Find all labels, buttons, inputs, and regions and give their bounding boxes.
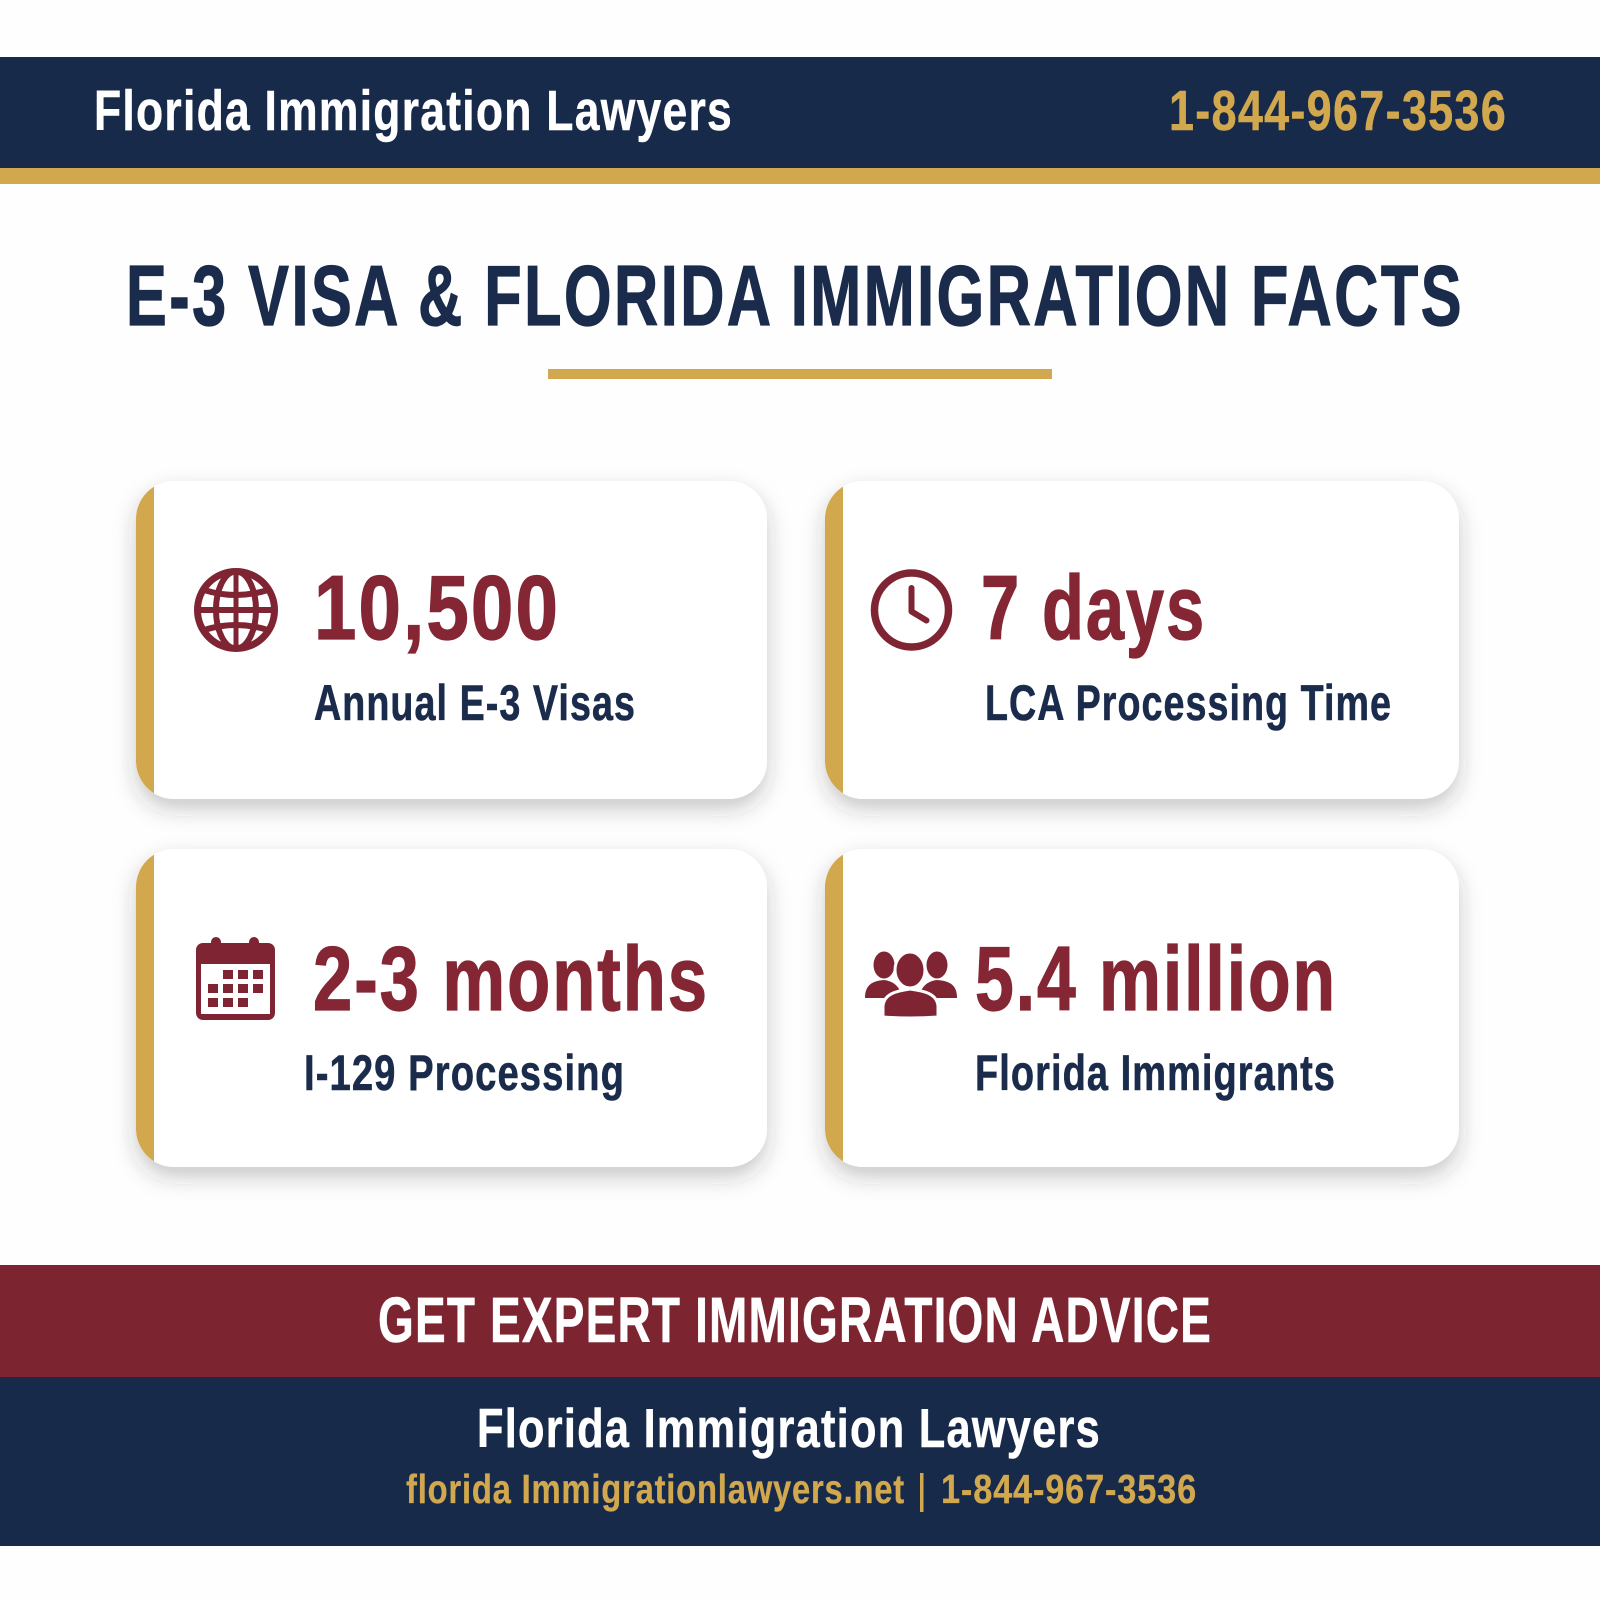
- firm name: Florida Immigration Lawyers: [94, 79, 733, 143]
- label: annual E-3 visas: Annual E-3 Visas: [314, 675, 636, 731]
- label: LCA processing time: LCA Processing Time: [985, 675, 1392, 731]
- call to action band: [0, 1265, 1600, 1377]
- footer band: [0, 1377, 1600, 1546]
- panel: I-129 processing: [136, 849, 767, 1167]
- icon: clock: [874, 573, 948, 647]
- icon: people: [865, 952, 957, 1018]
- stat: 5.4 million: 5.4 million: [975, 929, 1337, 1030]
- footer phone: 1-844-967-3536: [941, 1466, 1197, 1512]
- panel: Florida immigrants: [825, 849, 1459, 1167]
- stat: 7 days: 7 days: [981, 558, 1206, 659]
- stat: 2-3 months: 2-3 months: [313, 929, 709, 1030]
- footer firm name: Florida Immigration Lawyers: [477, 1397, 1101, 1459]
- label: I-129 processing: I-129 Processing: [304, 1045, 625, 1101]
- label: Florida immigrants: Florida Immigrants: [975, 1045, 1336, 1101]
- icon: calendar: [196, 937, 275, 1020]
- top header band: [0, 57, 1600, 184]
- call to action text: GET EXPERT IMMIGRATION ADVICE: [378, 1284, 1212, 1356]
- phone number: 1-844-967-3536: [1169, 79, 1507, 143]
- panel: LCA processing time: [825, 481, 1459, 799]
- stat: 10,500: 10,500: [314, 558, 560, 659]
- icon: globe: [198, 572, 274, 648]
- footer website: florida Immigrationlawyers.net: [406, 1466, 905, 1512]
- panel: annual E-3 visas: [136, 481, 767, 799]
